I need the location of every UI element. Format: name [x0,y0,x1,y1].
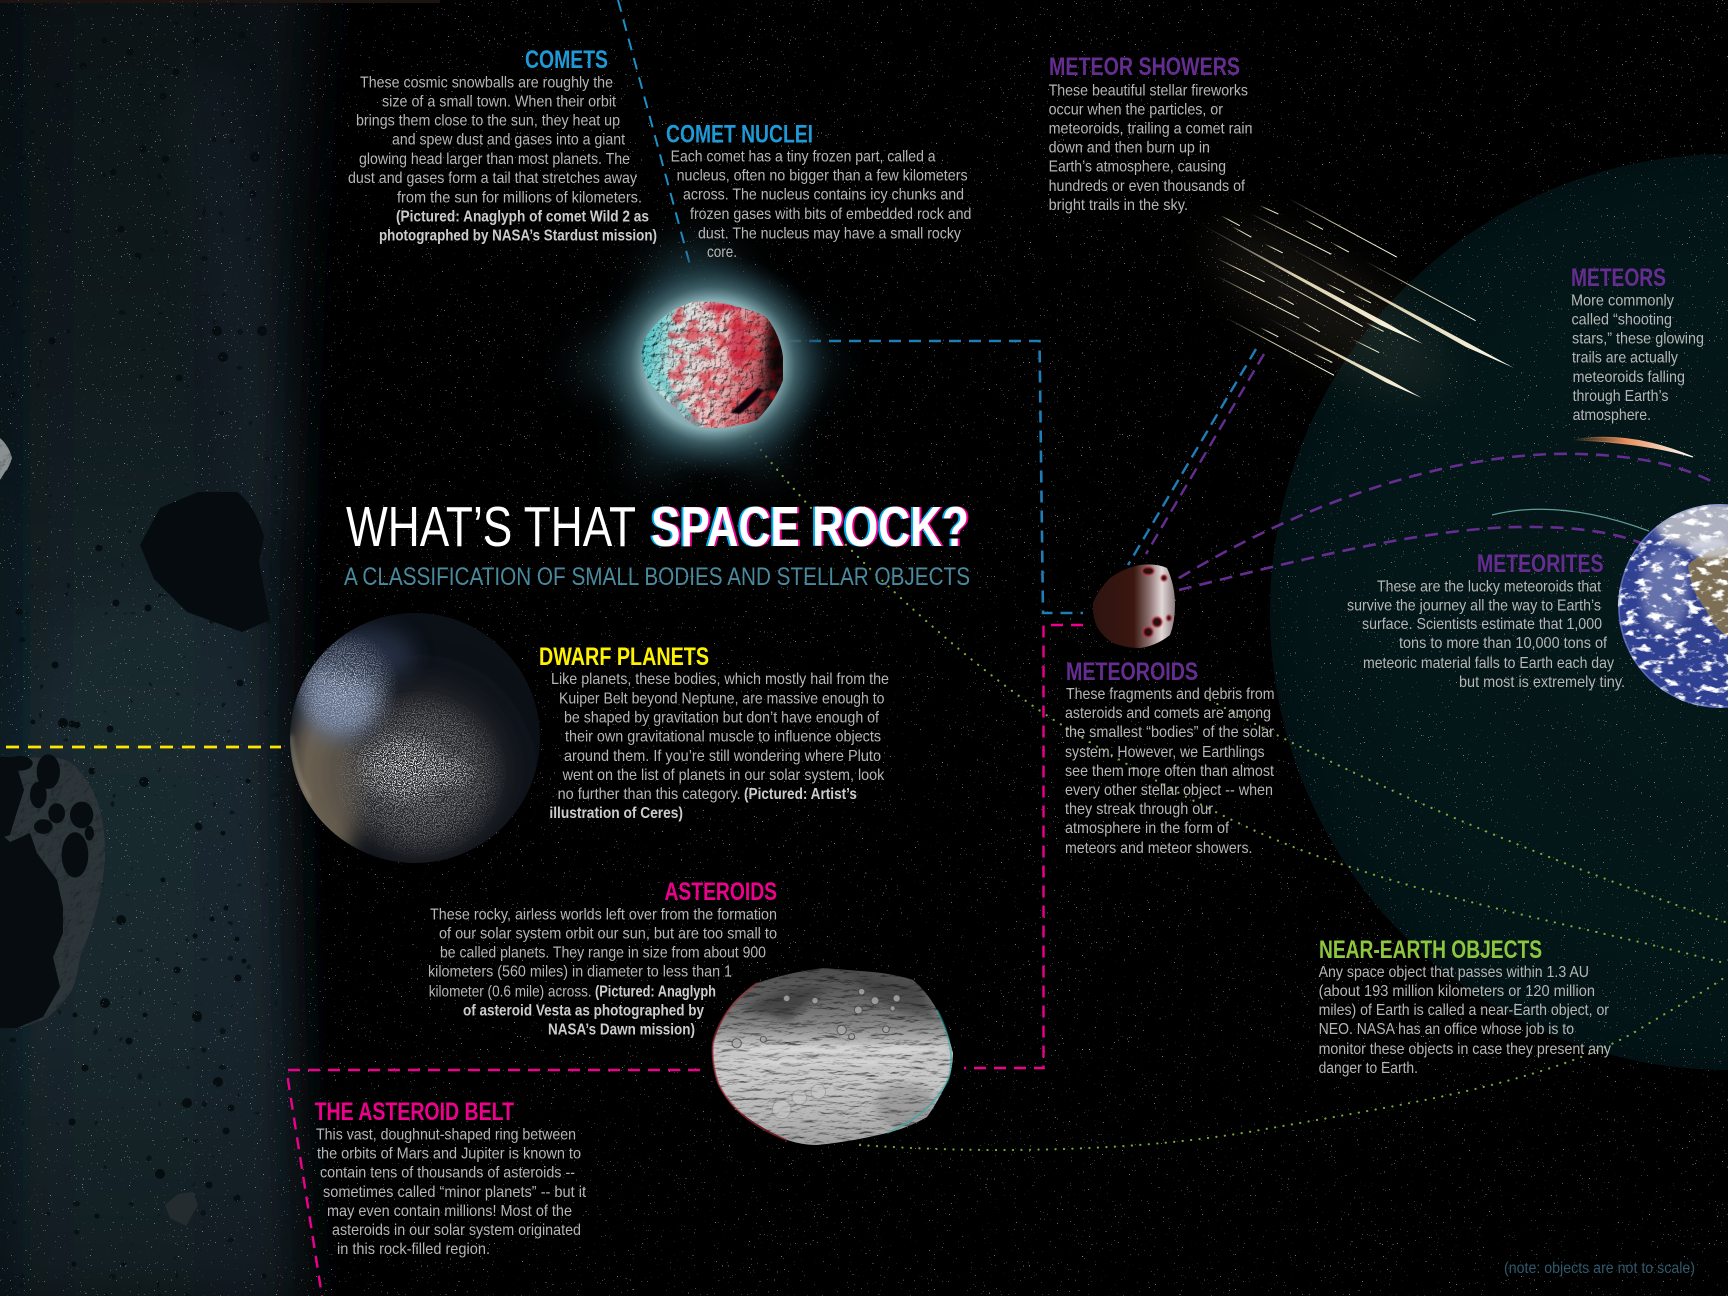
body: comet nuclei: dust. The nucleus may have a small rocky [698,226,961,242]
note: not to scale: (note: objects are not to scale) [1504,1260,1695,1277]
icon: large cratered boulder [0,754,105,1028]
body: dwarf planets: around them. If you’re still wondering where Pluto [564,748,881,765]
icon: thin meteorite trail [1492,509,1649,531]
dashed curve: meteors path [1179,454,1715,578]
body: comet nuclei [671,149,971,261]
heading: comet nuclei: COMET NUCLEI [666,121,813,149]
body: meteors: through Earth’s [1573,388,1668,405]
body: comets: photographed by NASA’s Stardust mission) [379,228,657,244]
body: dwarf planets: their own gravitational muscle to influence objects [565,728,881,745]
dotted orbit: asteroid to near earth [860,975,1728,1150]
heading: dwarf planets: DWARF PLANETS [539,643,709,671]
body: comets: size of a small town. When their orbit [382,94,616,111]
body: meteor showers [1049,82,1252,214]
body: meteor showers: These beautiful stellar fireworks [1049,82,1248,100]
body: comet nuclei: across. The nucleus contains icy chunks and [683,187,964,204]
body: comet nuclei: core. [707,244,737,261]
text block: dwarf planets [539,643,889,822]
body: dwarf planets: no further than this category. [558,786,741,803]
icon: dark boulder silhouette [140,492,270,632]
text block: meteors [1571,264,1704,424]
body: the asteroid belt [316,1126,587,1258]
body: meteorites [1347,578,1625,691]
body: dwarf planets: (Pictured: Artist’s [744,786,857,803]
body: near-earth objects: danger to Earth. [1319,1060,1418,1077]
dotted orbit: comet to near earth [745,430,1728,964]
body: asteroids: kilometer (0.6 mile) across. [429,983,592,1000]
body: meteors: called “shooting [1572,311,1672,328]
backdrop: near-earth disc [1270,154,1728,1070]
text block: comet nuclei [666,121,971,261]
body: near-earth objects: NEO. NASA has an office whose job is to [1319,1021,1574,1038]
body: meteoroids: atmosphere in the form of [1065,820,1229,837]
body: meteoroids [1065,686,1275,857]
body: comets: These cosmic snowballs are roughly the [360,75,613,92]
dotted orbit: meteoroid to near earth [1210,700,1728,923]
body: comet nuclei: frozen gases with bits of embedded rock and [690,206,971,223]
body: meteorites: tons to more than 10,000 tons of [1399,635,1608,652]
body: asteroids: of our solar system orbit our sun, but are too small to [439,926,777,942]
body: meteorites: survive the journey all the way to Earth’s [1347,597,1601,614]
body: meteors: atmosphere. [1573,407,1651,424]
body: dwarf planets: went on the list of planets in our solar system, look [562,767,885,784]
body: meteorites: These are the lucky meteoroids that [1377,578,1601,595]
dashed line: comets [618,0,690,265]
body: meteors: meteoroids falling [1573,369,1685,386]
heading: near-earth objects: NEAR-EARTH OBJECTS [1319,936,1542,964]
text block: near-earth objects [1319,936,1611,1077]
body: meteoroids: These fragments and debris from [1066,686,1274,703]
body: comets: dust and gases form a tail that stretches away [348,170,637,187]
body: meteorites: surface. Scientists estimate that 1,000 [1362,616,1602,633]
icon: asteroid vesta [713,968,953,1145]
text block: the asteroid belt [315,1098,587,1258]
body: asteroids [428,906,777,1038]
heading: meteorites: METEORITES [1477,550,1604,578]
body: asteroids: be called planets. They range in size from about 900 [440,945,766,962]
body: meteor showers: down and then burn up in [1049,140,1210,156]
body: comets: brings them close to the sun, they heat up [356,113,620,130]
body: the asteroid belt: sometimes called “minor planets” -- but it [323,1184,587,1201]
heading: comets: COMETS [525,46,608,74]
icon: earth [1618,501,1728,708]
body: near-earth objects [1319,964,1611,1077]
icon: dwarf planet ceres [287,613,540,865]
body: meteorites: but most is extremely tiny. [1459,674,1625,691]
icon: small boulder lower left [165,1192,198,1226]
body: near-earth objects: (about 193 million kilometers or 120 million [1319,983,1595,1000]
body: dwarf planets: illustration of Ceres) [549,805,683,822]
body: dwarf planets: be shaped by gravitation but don’t have enough of [564,709,879,726]
body: near-earth objects: Any space object that passes within 1.3 AU [1319,964,1589,981]
icon: small boulder left edge [0,438,12,480]
title: WHAT’S THAT [346,495,636,559]
body: meteors: More commonly [1571,292,1674,309]
body: comets: from the sun for millions of kilometers. [397,190,642,206]
dashed line: meteoroids to asteroids [964,625,1083,1068]
dashed line: dwarf planets [6,746,281,748]
title [346,495,969,559]
icon: meteoroid [1093,564,1175,648]
dashed line: asteroids to asteroid belt [288,1070,700,1296]
body: the asteroid belt: the orbits of Mars and Jupiter is known to [317,1145,581,1162]
heading: meteoroids: METEOROIDS [1066,658,1198,686]
body: meteors: trails are actually [1572,350,1678,366]
text block: meteoroids [1065,658,1275,857]
body: the asteroid belt: This vast, doughnut-shaped ring between [316,1126,576,1143]
body: the asteroid belt: asteroids in our solar system originated [332,1222,581,1239]
body: the asteroid belt: may even contain millions! Most of the [327,1203,572,1220]
body: dwarf planets [549,671,889,822]
text block: comets [348,46,657,244]
body: meteor showers: Earth’s atmosphere, causing [1049,158,1226,176]
heading: meteors: METEORS [1571,264,1666,292]
dashed line: comet nuclei to meteoroids [789,341,1083,613]
body: near-earth objects: monitor these objects in case they present any [1319,1041,1611,1058]
text block: asteroids [428,878,777,1038]
body: the asteroid belt: contain tens of thousands of asteroids -- [320,1164,575,1181]
body: dwarf planets: Like planets, these bodies, which mostly hail from the [551,671,889,688]
body: meteoroids: asteroids and comets are among [1065,705,1271,722]
body: near-earth objects: miles) of Earth is called a near-Earth object, or [1319,1002,1610,1019]
body: meteor showers: occur when the particles, or [1049,102,1224,118]
body: asteroids: kilometers (560 miles) in diameter to less than 1 [428,964,732,981]
body: meteoroids: they streak through our [1065,801,1214,818]
body: comets: and spew dust and gases into a giant [392,132,625,149]
heading: the asteroid belt: THE ASTEROID BELT [315,1098,514,1126]
body: meteors: stars,” these glowing [1572,330,1704,347]
body: meteor showers: bright trails in the sky. [1049,197,1188,214]
text block: meteorites [1347,550,1625,691]
heading: asteroids: ASTEROIDS [664,878,777,906]
body: asteroids: of asteroid Vesta as photographed by [463,1002,704,1019]
body: asteroids: These rocky, airless worlds left over from the formation [430,906,777,924]
dashed line: blue meteor shower link [1128,349,1256,565]
body: meteoroids: system. However, we Earthlings [1065,744,1265,761]
heading: meteor showers: METEOR SHOWERS [1049,53,1240,81]
body: comets: (Pictured: Anaglyph of comet Wild 2 as [396,208,649,226]
title: SPACE ROCK? [651,495,969,559]
body: meteoroids: meteors and meteor showers. [1065,840,1252,857]
body: comets [348,75,657,244]
dashed curve: meteorites path [1179,527,1641,590]
body: meteor showers: meteoroids, trailing a comet rain [1049,120,1252,138]
body: asteroids: NASA’s Dawn mission) [548,1021,695,1038]
panel: asteroid belt backdrop [0,0,340,1296]
dashed line: purple meteor shower link [1146,354,1264,554]
body: meteor showers: hundreds or even thousands of [1049,178,1245,195]
body: meteors [1571,292,1704,424]
body: comet nuclei: nucleus, often no bigger than a few kilometers [677,168,968,185]
icon: comet nucleus with glow [570,245,835,480]
icon: single meteor [1572,437,1693,457]
body: meteoroids: every other stellar object -- when [1065,782,1273,799]
body: meteoroids: see them more often than almost [1065,763,1274,780]
body: dwarf planets: Kuiper Belt beyond Neptune, are massive enough to [559,690,884,707]
subtitle: A CLASSIFICATION OF SMALL BODIES AND STELLAR OBJECTS [344,563,970,591]
body: meteoroids: the smallest “bodies” of the solar [1065,724,1275,741]
text block: meteor showers [1049,53,1252,214]
icon: meteor shower streaks [1188,196,1514,424]
body: the asteroid belt: in this rock-filled region. [337,1241,490,1258]
body: comet nuclei: Each comet has a tiny frozen part, called a [671,149,936,166]
body: comets: glowing head larger than most planets. The [359,151,630,168]
body: meteorites: meteoric material falls to Earth each day [1363,655,1614,672]
body: asteroids: (Pictured: Anaglyph [595,983,716,1000]
